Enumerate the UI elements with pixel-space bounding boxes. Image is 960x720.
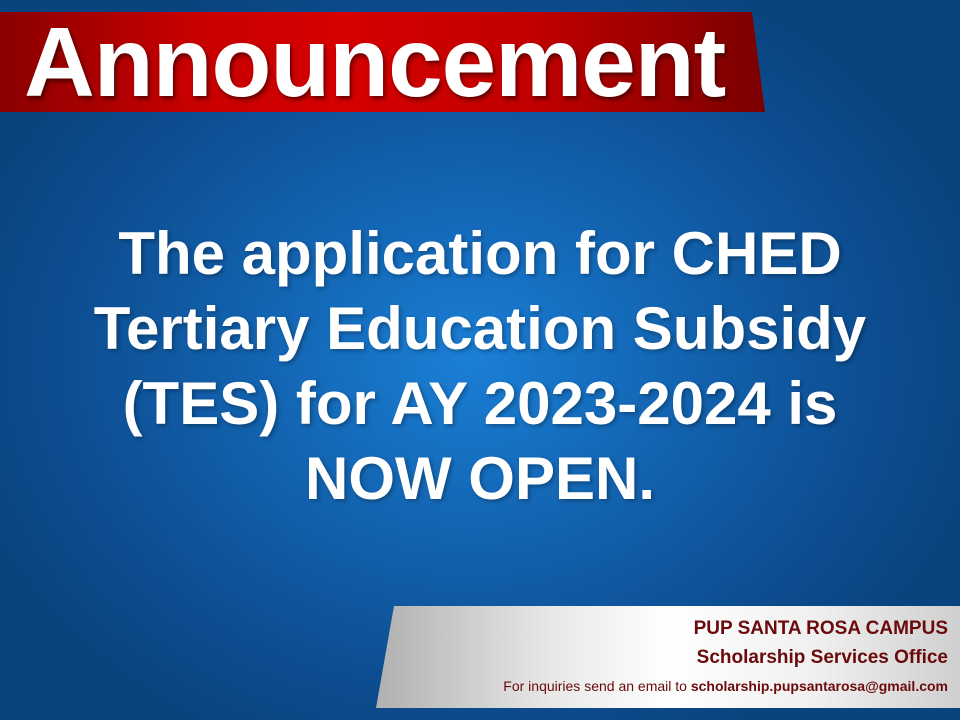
campus name: PUP SANTA ROSA CAMPUS <box>694 618 948 639</box>
main message: NOW OPEN. <box>305 445 655 512</box>
main message: (TES) for AY 2023-2024 is <box>123 370 837 437</box>
main message: The application for CHED <box>118 220 842 287</box>
office name: Scholarship Services Office <box>697 647 948 668</box>
contact line: For inquiries send an email to scholarship.pupsantarosa@gmail.com <box>503 678 948 694</box>
main message <box>94 220 868 512</box>
main message: Tertiary Education Subsidy <box>94 295 866 362</box>
footer box <box>376 606 960 708</box>
title banner: Announcement <box>24 7 725 117</box>
